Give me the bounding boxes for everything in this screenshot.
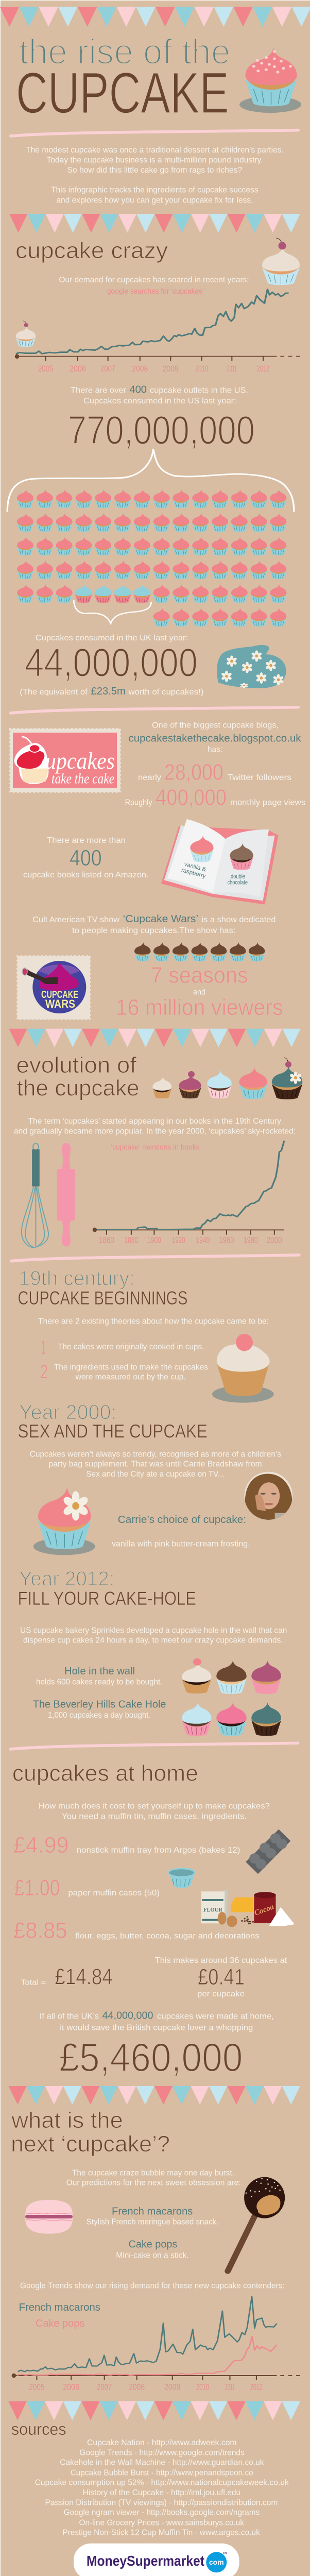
- heading: what is the next cupcake: next ‘cupcake’?: [11, 2131, 170, 2157]
- text: UK saving: 44,000,000: [102, 2010, 153, 2021]
- text: cupcake wars intro: to people making cupcakes.The show has:: [72, 926, 236, 935]
- chart axis years: 2008: [129, 2382, 145, 2392]
- chart axis years: 2010: [195, 364, 208, 374]
- chart axis years: 1940: [196, 1235, 210, 1245]
- logo: MoneySupermarket: com: [209, 2558, 224, 2566]
- chart axis years: [29, 2382, 263, 2392]
- cost per cupcake: This makes around 36 cupcakes at: [155, 1956, 287, 1965]
- text: equivalent value: worth of cupcakes!): [128, 688, 203, 697]
- divider: [10, 1743, 298, 1749]
- text: sprinkles: US cupcake bakery Sprinkles developed a cupcake hole in the wall that can: [20, 1626, 287, 1635]
- text: US outlets: There are over: [71, 386, 127, 395]
- bunting: cupcake crazy: [9, 214, 300, 233]
- logo: MoneySupermarket: [74, 2544, 239, 2576]
- text: biggest blog: [129, 721, 302, 754]
- logo: cupcakes take the cake: [10, 728, 120, 792]
- text: two theories: 1: [41, 1337, 46, 1359]
- text: hole in the wall: holds 600 cakes ready to be bought.: [36, 1677, 163, 1686]
- heading: evolution of the cupcake: the cupcake: [17, 1076, 140, 1101]
- cost: ingredients: flour, eggs, butter, cocoa, sugar and decorations: [76, 1932, 260, 1941]
- text: carrie: Cupcakes weren’t always so trendy, recognised as more of a children’s: [30, 1450, 281, 1459]
- heading: 19th century: 19th century:: [19, 1267, 135, 1290]
- text: google trends: Google Trends show our rising demand for these new cupcake contenders:: [20, 2282, 285, 2291]
- chart axis years: 2012: [257, 364, 269, 374]
- text: cake pops: Cake pops: [129, 2239, 177, 2250]
- cupcake: spotted: [207, 1071, 232, 1098]
- chart legend: French macarons: [19, 2302, 100, 2313]
- text: cupcake wars intro: ‘Cupcake Wars’: [123, 913, 198, 925]
- text: US outlets: [71, 384, 248, 405]
- cupcake: plain: [152, 1077, 171, 1098]
- text: UK saving: cupcakes were made at home,: [157, 2012, 274, 2021]
- chart label: ‘cupcake’ mentions in books: [111, 1143, 200, 1152]
- heading: year 2012: [18, 1568, 196, 1609]
- big number: 44,000,000: 44,000,000: [25, 639, 198, 685]
- stat: twitter followers: nearly: [138, 773, 161, 782]
- icon: ingredients: FLOUR: [203, 1906, 222, 1913]
- icon: whisk: [22, 1143, 48, 1248]
- text: sprinkles: dispense cup cakes 24 hours a day, to meet our crazy cupcake demands.: [23, 1636, 283, 1645]
- stats: seasons and viewers: 16 million viewers: [116, 995, 283, 1020]
- heading: year 2000: [18, 1401, 208, 1442]
- logo: cupcake wars: [18, 956, 90, 1019]
- logo: cupcake wars: CUPCAKE: [41, 989, 78, 1001]
- title: [16, 32, 231, 125]
- text: bubble: The cupcake craze bubble may one day burst.: [72, 2169, 234, 2178]
- intro text: So how did this little cake go from rags to riches?: [67, 166, 242, 175]
- chart axis years: 1980: [244, 1235, 258, 1245]
- cost: paper cases: paper muffin cases (50): [68, 1889, 160, 1897]
- text: biggest blog: cupcakestakethecake.blogspot.co.uk: [129, 733, 302, 744]
- logo: cupcakes take the cake: upcakes: [45, 748, 115, 774]
- text: macarons: Stylish French meringue based snack.: [87, 2218, 218, 2227]
- total cost: £14.84: [55, 1964, 113, 1990]
- intro text: and explores how you can get your cupcake fix for less.: [56, 196, 253, 205]
- text: US outlets: Cupcakes consumed in the US last year:: [83, 397, 236, 405]
- text: equivalent value: £23.5m: [91, 686, 126, 697]
- text: UK saving: If all of the UK’s: [40, 2012, 99, 2021]
- text: term cupcakes: The term ‘cupcakes’ started appearing in our books in the 19th Century: [28, 1117, 281, 1126]
- logo: cupcakes take the cake: take the cake: [51, 771, 114, 787]
- heading: cupcake crazy: cupcake crazy: [15, 238, 168, 263]
- text: UK saving: it would save the British cupcake lover a whopping: [60, 2024, 253, 2032]
- cupcake pictogram: UK vs US: [17, 489, 286, 626]
- cost: muffin tray: £4.99: [13, 1833, 69, 1858]
- cost: ingredients: £8.85: [13, 1918, 67, 1943]
- text: carrie: party bag supplement. That was until Carrie Bradshaw from: [48, 1460, 262, 1469]
- total cost: [21, 1964, 113, 1990]
- divider: [11, 707, 298, 713]
- stat: books on amazon: cupcake books listed on Amazon.: [23, 871, 149, 879]
- sources list: Prestige Non-Stick 12 Cup Muffin Tin - www.argos.co.uk: [62, 2529, 261, 2537]
- chart axis years: [99, 1235, 282, 1245]
- text: carrie: [30, 1450, 281, 1479]
- cupcake: plum: [179, 1071, 201, 1098]
- text: cost question: [39, 1802, 270, 1821]
- text: US outlets: 400: [129, 384, 147, 395]
- icon: recipe book: chocolate: [228, 880, 248, 886]
- heading: 19th century: [18, 1267, 187, 1309]
- chart axis years: 2005: [38, 364, 54, 374]
- text: hole in the wall: Hole in the wall: [64, 1666, 135, 1677]
- cupcake: decorated: [272, 1058, 302, 1099]
- text: two theories: were measured out by the cup.: [75, 1372, 186, 1381]
- big number: 770,000,000: 770,000,000: [68, 408, 255, 453]
- stat: books on amazon: 400: [70, 845, 102, 871]
- text: equivalent value: [20, 686, 203, 697]
- chart axis years: 1860: [99, 1235, 114, 1245]
- stat: monthly page views: 400,000: [156, 785, 227, 810]
- chart axis years: 2000: [267, 1235, 282, 1245]
- cost: muffin tray: [13, 1833, 240, 1858]
- sources list: History of the Cupcake - http://iml.jou.ufl.edu: [82, 2488, 240, 2497]
- icon: paper case: [168, 1868, 196, 1888]
- chart axis years: 2011: [227, 364, 237, 374]
- cost per cupcake: [155, 1956, 287, 1998]
- heading: what is the next cupcake: [11, 2108, 170, 2157]
- icon: recipe book: raspberry: [181, 867, 206, 879]
- seven seasons cupcake row: [134, 942, 265, 961]
- text: carrie: Sex and the City ate a cupcake on TV...: [86, 1470, 225, 1479]
- text: hole in the wall: 1,000 cupcakes a day bought.: [48, 1711, 150, 1720]
- text: US outlets: cupcake outlets in the US.: [150, 386, 248, 395]
- heading: what is the next cupcake: what is the: [11, 2108, 123, 2133]
- intro text: The modest cupcake was once a traditional dessert at children’s parties.: [26, 146, 284, 155]
- brace: UK share: [74, 600, 151, 623]
- text: UK consumption: Cupcakes consumed in the UK last year:: [36, 634, 188, 642]
- logo: MoneySupermarket: MoneySupermarket: [87, 2553, 204, 2569]
- callout: carrie's choice: [112, 1514, 250, 1549]
- icon: recipe book: vanilla &: [183, 861, 207, 873]
- chart axis years: 2005: [29, 2382, 44, 2392]
- icon: small cherry cupcake: [16, 321, 36, 347]
- chart axis years: [38, 364, 269, 374]
- chart axis years: 2007: [97, 2382, 112, 2392]
- text: cost question: How much does it cost to set yourself up to make cupcakes?: [39, 1802, 270, 1811]
- icon: recipe book: [161, 819, 279, 905]
- sources list: Cupcake Nation - http://www.adweek.com: [87, 2438, 237, 2447]
- text: UK saving: [40, 2010, 274, 2032]
- text: cake pops: [116, 2239, 189, 2260]
- logo: cupcake wars: WARS: [45, 997, 75, 1010]
- cost: muffin tray: nonstick muffin tray from Argos (bakes 12): [77, 1846, 240, 1855]
- chart axis years: 1960: [219, 1235, 234, 1245]
- text: biggest blog: has:: [208, 745, 222, 754]
- sources list: On-line Grocery Prices - www.sainsburys.co.uk: [79, 2518, 245, 2527]
- divider: [11, 1255, 299, 1261]
- bunting: sources: [8, 2401, 300, 2420]
- text: cost question: You need a muffin tin, muffin cases, ingredients.: [62, 1812, 247, 1821]
- icon: ingredients: [201, 1890, 295, 1927]
- total cost: Total =: [21, 1978, 46, 1987]
- callout: carrie's choice: Carrie’s choice of cupcake:: [118, 1514, 246, 1526]
- callout: carrie's choice: vanilla with pink butter-cream frosting.: [112, 1540, 250, 1549]
- six cupcakes: [182, 1658, 281, 1736]
- heading: cupcakes at home: cupcakes at home: [12, 1761, 198, 1786]
- line chart: macarons and cake pops: [12, 2297, 300, 2380]
- chart axis years: 2012: [250, 2382, 263, 2392]
- sources list: Google ngram viewer - http://books.google.com/ngrams: [64, 2509, 260, 2517]
- text: two theories: The ingredients used to make the cupcakes: [54, 1363, 208, 1371]
- sources list: Cupcake consumption up 52% - http://www.nationalcupcakeweek.co.uk: [35, 2479, 289, 2487]
- text: equivalent value: (The equivalent of: [20, 688, 88, 697]
- text: cupcake wars intro: [32, 913, 276, 935]
- chart axis years: 2006: [63, 2382, 79, 2392]
- sources list: Google Trends - http://www.google.com/trends: [79, 2448, 245, 2457]
- chart axis years: 2009: [164, 2382, 180, 2392]
- icon: large cherry cupcake: [262, 238, 300, 285]
- cost: ingredients: [13, 1918, 260, 1943]
- text: cake pops: Mini-cake on a stick.: [116, 2251, 189, 2260]
- text: two theories: The cakes were originally cooked in cups.: [58, 1343, 204, 1351]
- text: bubble: [66, 2169, 241, 2188]
- stats: seasons and viewers: 7 seasons: [150, 963, 248, 988]
- icon: muffin tray: [246, 1829, 290, 1874]
- chart label: google searches for ‘cupcakes’: [107, 287, 204, 296]
- sources list: Cupcake Bubble Burst - http://www.penandspoon.co: [71, 2468, 253, 2477]
- stat: books on amazon: There are more than: [47, 836, 126, 845]
- chart axis years: 2006: [70, 364, 86, 374]
- chart axis years: 1900: [147, 1235, 161, 1245]
- stat: monthly page views: Roughly: [125, 799, 152, 807]
- text: cupcake wars intro: Cult American TV show: [32, 916, 119, 924]
- text: two theories: There are 2 existing theories about how the cupcake came to be:: [38, 1317, 269, 1326]
- stat: monthly page views: monthly page views: [230, 799, 305, 807]
- chart axis years: 2010: [196, 2382, 209, 2392]
- bunting: top: [0, 7, 310, 27]
- bunting: evolution: [9, 1029, 301, 1047]
- heading: year 2012: FILL YOUR CAKE-HOLE: [18, 1588, 196, 1609]
- divider: [11, 130, 298, 136]
- icon: title cupcake: [239, 47, 301, 113]
- cupcake: pink: [239, 1067, 267, 1099]
- stat: monthly page views: [125, 785, 305, 810]
- stat: twitter followers: Twitter followers: [228, 773, 291, 782]
- big number: saving: £5,460,000: [59, 2035, 243, 2080]
- heading: evolution of the cupcake: [16, 1053, 140, 1101]
- text: cupcake wars intro: is a show dedicated: [202, 916, 276, 924]
- brace: US total: [7, 449, 294, 512]
- stats: seasons and viewers: [116, 963, 283, 1020]
- cupcake evolution row: [152, 1058, 302, 1099]
- intro text: Today the cupcake business is a multi-million pound industry.: [47, 156, 263, 165]
- heading: sources: sources: [11, 2420, 66, 2438]
- text: sprinkles: [20, 1626, 287, 1645]
- sources list: Cakehole in the Wall Machine - http://www.guardian.co.uk: [60, 2459, 264, 2467]
- cost per cupcake: per cupcake: [197, 1990, 245, 1998]
- cost per cupcake: £0.41: [198, 1964, 245, 1990]
- chart axis years: 2011: [225, 2382, 235, 2392]
- text: hole in the wall: The Beverley Hills Cake Hole: [33, 1699, 166, 1710]
- icon: plain cupcake with cherry: [212, 1334, 274, 1403]
- icon: macaron: [25, 2200, 73, 2234]
- icon: recipe book: double: [231, 874, 245, 880]
- stat: books on amazon: [23, 836, 149, 879]
- text: bubble: Our predictions for the next sweet obsession are:: [66, 2179, 241, 2188]
- stat: twitter followers: 28,000: [164, 759, 223, 785]
- sources list: [35, 2438, 289, 2537]
- text: term cupcakes: [14, 1117, 296, 1136]
- text: two theories: [38, 1317, 269, 1383]
- intro text: This infographic tracks the ingredients of cupcake success: [51, 185, 259, 194]
- text: macarons: [87, 2206, 218, 2227]
- text: two theories: 2: [40, 1362, 48, 1383]
- icon: cake pop: [228, 2177, 285, 2271]
- line chart: book mentions: [93, 1141, 284, 1235]
- icon: rolling pin: [57, 1143, 75, 1247]
- text: hole in the wall: [33, 1666, 166, 1720]
- heading: year 2012: Year 2012:: [19, 1568, 115, 1590]
- cost: paper cases: £1.00: [14, 1875, 60, 1901]
- stat: twitter followers: [138, 759, 291, 785]
- chart axis years: 2008: [132, 364, 148, 374]
- chart axis years: 2009: [163, 364, 179, 374]
- logo: MoneySupermarket: TM: [223, 2552, 227, 2555]
- icon: oven mitt: [217, 645, 286, 688]
- text: demand: Our demand for cupcakes has soared in recent years:: [59, 276, 249, 284]
- line chart: google searches: [15, 290, 300, 361]
- icon: pink cupcake with daisy: [33, 1487, 95, 1555]
- bunting: next cupcake: [8, 2086, 300, 2105]
- text: macarons: French macarons: [112, 2206, 193, 2217]
- chart axis years: 1880: [124, 1235, 138, 1245]
- title line: CUPCAKE: CUPCAKE: [16, 61, 229, 125]
- chart legend: Cake pops: [36, 2318, 84, 2329]
- heading: year 2000: SEX AND THE CUPCAKE: [18, 1421, 208, 1442]
- heading: year 2000: Year 2000:: [19, 1401, 116, 1423]
- sources list: Passion Distribution (TV viewings) - http://passiondistribution.com: [45, 2498, 278, 2507]
- chart legend: [19, 2302, 100, 2329]
- photo: Carrie Bradshaw: [243, 1471, 295, 1521]
- stats: seasons and viewers: and: [193, 988, 205, 997]
- title line: the rise of the: the rise of the: [19, 32, 231, 72]
- icon: ingredients: Cocoa: [253, 1903, 275, 1918]
- cost: paper cases: [14, 1875, 160, 1901]
- chart axis years: 1920: [172, 1235, 185, 1245]
- text: term cupcakes: and gradually became more popular. In the year 2000, ‘cupcakes’ sky-rocketed:: [14, 1127, 296, 1136]
- heading: evolution of the cupcake: evolution of: [16, 1053, 137, 1078]
- chart axis years: 2007: [100, 364, 115, 374]
- text: biggest blog: One of the biggest cupcake blogs,: [152, 721, 279, 730]
- intro text: [26, 146, 284, 205]
- heading: 19th century: CUPCAKE BEGINNINGS: [18, 1287, 187, 1309]
